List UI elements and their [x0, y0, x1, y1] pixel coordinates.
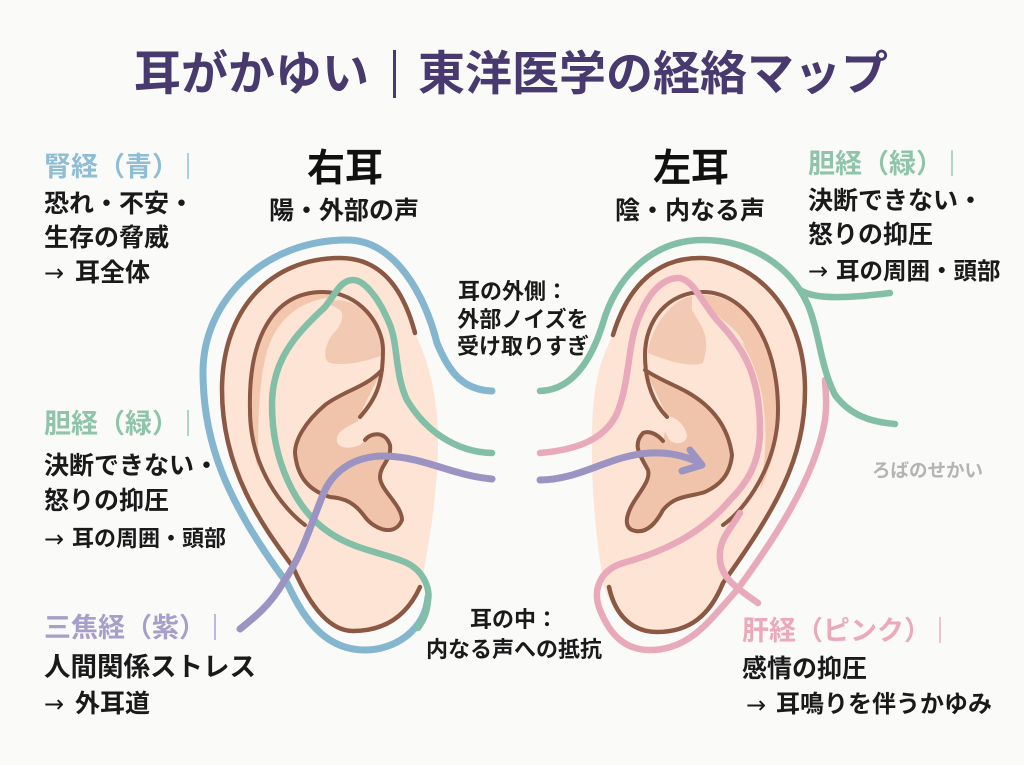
panel: gallbladder meridian right: 胆経（緑）: [44, 409, 179, 439]
meridian: pink: [540, 278, 826, 650]
watermark: ろばのせかい: [872, 460, 983, 481]
callout: inner ear: 耳の中：: [470, 607, 558, 632]
heading: left ear: [615, 148, 765, 225]
panel: gallbladder meridian right: 耳の周囲・頭部: [72, 526, 226, 551]
heading: left ear: 陰・内なる声: [615, 197, 765, 225]
panel: gallbladder meridian right: →: [44, 525, 64, 553]
panel: liver meridian: →: [746, 691, 766, 719]
panel: gallbladder meridian left: →: [808, 257, 828, 285]
panel: gallbladder meridian left: 胆経（緑）: [808, 149, 943, 179]
heading: left ear: 左耳: [653, 148, 729, 190]
meridian: blue: [203, 240, 492, 650]
panel: kidney meridian: →: [44, 259, 64, 287]
panel: kidney meridian: [44, 152, 194, 287]
heading: right ear: 陽・外部の声: [269, 197, 419, 225]
meridian: purple: [240, 456, 492, 629]
callout: outer ear: [457, 279, 589, 359]
panel: kidney meridian: 恐れ・不安・: [44, 190, 194, 218]
heading: right ear: [269, 148, 419, 225]
callout: inner ear: [426, 607, 602, 662]
panel: triple burner meridian: 外耳道: [75, 690, 150, 718]
panel: gallbladder meridian right: 怒りの抑圧: [44, 487, 169, 515]
meridian: green: [540, 240, 895, 424]
meridian: green branch: [800, 290, 890, 297]
left ear: [540, 240, 895, 650]
panel: gallbladder meridian left: [808, 149, 1000, 285]
panel: liver meridian: [742, 616, 992, 719]
panel: triple burner meridian: 三焦経（紫）: [44, 613, 206, 643]
panel: kidney meridian: 生存の脅威: [44, 224, 169, 252]
panel: liver meridian: 感情の抑圧: [742, 655, 867, 683]
callout: outer ear: 外部ノイズを: [457, 306, 589, 332]
panel: triple burner meridian: 人間関係ストレス: [44, 652, 256, 682]
right ear: [203, 240, 492, 650]
panel: liver meridian: 肝経（ピンク）: [742, 616, 931, 646]
callout: inner ear: 内なる声への抵抗: [426, 637, 602, 662]
panel: gallbladder meridian left: 決断できない・: [808, 187, 983, 215]
meridian: purple arrow: [540, 450, 702, 480]
callout: outer ear: 耳の外側：: [458, 279, 568, 304]
panel: triple burner meridian: →: [44, 690, 64, 718]
heading: right ear: 右耳: [307, 148, 383, 190]
title: 耳がかゆい 東洋医学の経絡マップ: [134, 47, 888, 100]
panel: gallbladder meridian right: 決断できない・: [44, 452, 219, 480]
panel: liver meridian: 耳鳴りを伴うかゆみ: [776, 691, 992, 718]
callout: outer ear: 受け取りすぎ: [457, 334, 589, 359]
panel: gallbladder meridian left: 耳の周囲・頭部: [836, 258, 1000, 284]
panel: gallbladder meridian left: 怒りの抑圧: [808, 221, 933, 249]
panel: kidney meridian: 腎経（青）: [44, 152, 179, 182]
panel: gallbladder meridian right: [44, 409, 226, 553]
meridian: green: [272, 280, 492, 628]
panel: kidney meridian: 耳全体: [75, 259, 150, 287]
meridian: pink branch: [720, 513, 758, 603]
panel: triple burner meridian: [44, 613, 256, 718]
